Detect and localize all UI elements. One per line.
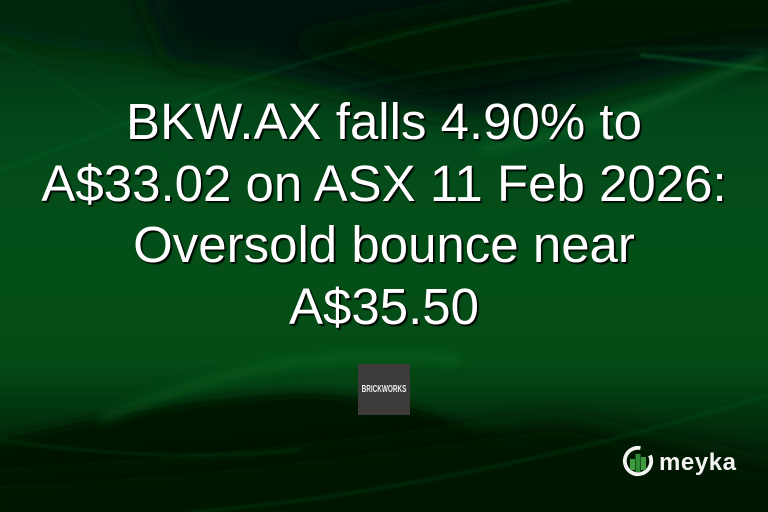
logo: meyka — [622, 446, 737, 476]
logo: meyka: meyka — [659, 449, 737, 476]
title: A$33.02 on ASX 11 Feb 2026: — [41, 154, 727, 212]
title: Oversold bounce near — [133, 216, 635, 273]
title: A$35.50 — [289, 278, 479, 334]
title: BKW.AX falls 4.90% to — [126, 93, 642, 150]
title — [41, 93, 727, 334]
logo: Brickworks — [358, 364, 410, 415]
logo: Brickworks: BRICKWORKS — [362, 384, 406, 395]
